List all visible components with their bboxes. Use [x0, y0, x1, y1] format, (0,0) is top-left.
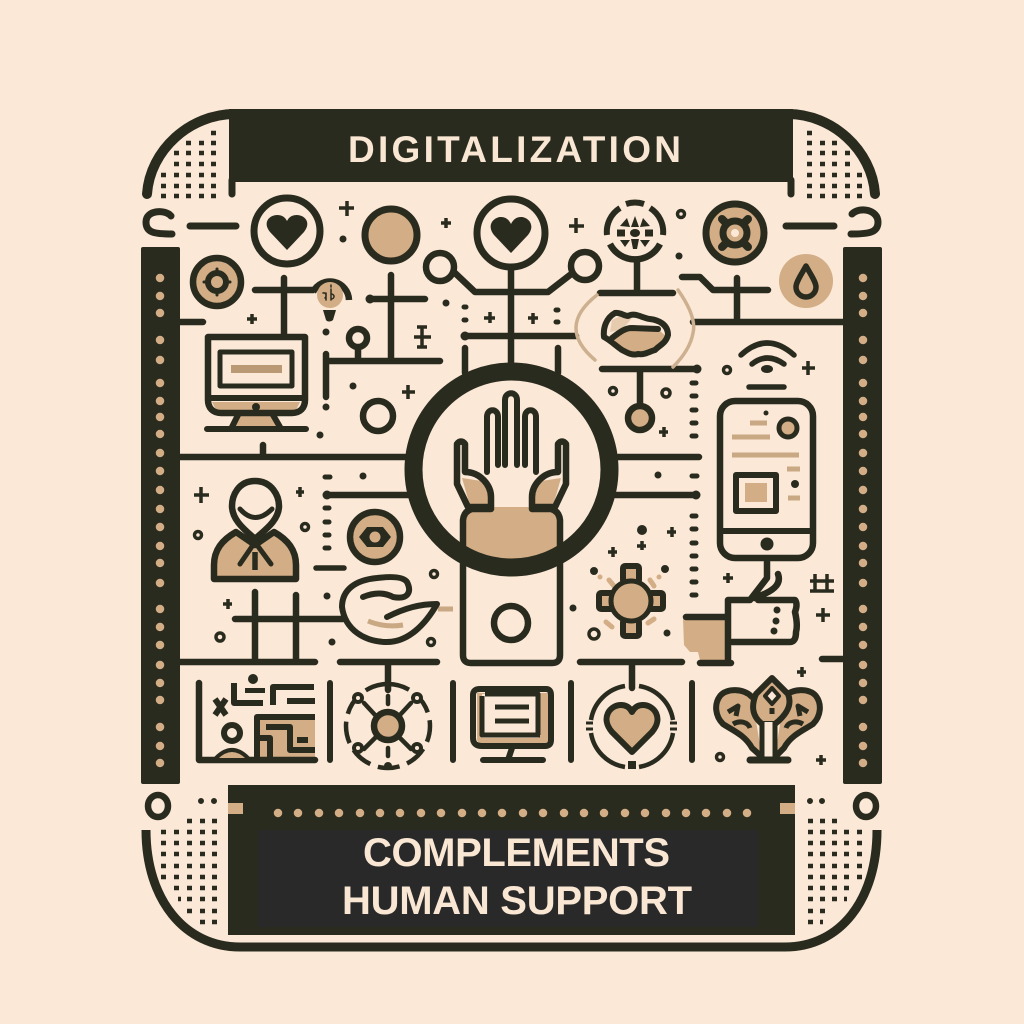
- icon: gear eye badge: [706, 204, 764, 262]
- left thumb: [457, 442, 491, 507]
- corner dot grids top: [161, 133, 862, 196]
- caption text: HUMAN SUPPORT: [342, 879, 692, 923]
- icon: maze with person: [199, 674, 315, 760]
- ring: [414, 372, 610, 568]
- icon: tree: [716, 678, 820, 760]
- icon: ring with stem: [349, 329, 367, 347]
- icon: person: [214, 481, 296, 579]
- icon: monitor bottom: [473, 689, 552, 760]
- title: DIGITALIZATION: [348, 129, 681, 170]
- side hooks: [146, 210, 878, 234]
- bottom caption panel: [228, 785, 795, 935]
- icon: globe: [607, 203, 663, 259]
- icon: heart circle centre: [477, 199, 545, 267]
- icon: heart target: [586, 686, 677, 769]
- infographic: [141, 109, 882, 952]
- icon: thumbs up: [683, 562, 797, 663]
- right thumb: [532, 442, 566, 507]
- side rails with dots: [141, 247, 882, 784]
- bottom row dividers: [330, 683, 692, 760]
- corner dot grids bottom: [161, 821, 862, 922]
- icon: network circle: [346, 684, 430, 770]
- fingers: [487, 393, 536, 472]
- icon: light bulb: [313, 279, 349, 322]
- dotted connectors and scattered dots: [325, 307, 697, 595]
- icon: desktop monitor: [207, 337, 306, 429]
- node with stem under handshake: [628, 406, 652, 430]
- icon: water drop: [779, 254, 833, 308]
- icon: left target: [193, 258, 241, 306]
- caption text: COMPLEMENTS: [363, 831, 670, 875]
- gear dots: [637, 525, 647, 535]
- bottom frame: [146, 830, 877, 947]
- sparkles and plus marks: [194, 201, 834, 765]
- icon: handshake: [576, 290, 694, 367]
- icon: hex badge: [350, 512, 400, 562]
- central hand emblem: [414, 372, 610, 663]
- thumb tan fill: [462, 478, 561, 506]
- icon: lower ring: [363, 401, 393, 431]
- icon: gear: [599, 566, 663, 636]
- arm panel: [463, 507, 560, 663]
- top frame with title banner: [147, 109, 875, 194]
- icon: tan circle: [365, 209, 417, 261]
- icon: heart circle left: [254, 198, 320, 264]
- connector lines: [180, 263, 843, 690]
- icon: open hand: [342, 577, 453, 642]
- node rings beside heart: [426, 252, 599, 281]
- icon: wifi: [741, 343, 794, 387]
- small rings: [194, 210, 730, 760]
- bottom rings: [148, 795, 876, 817]
- icon: smartphone: [720, 401, 813, 558]
